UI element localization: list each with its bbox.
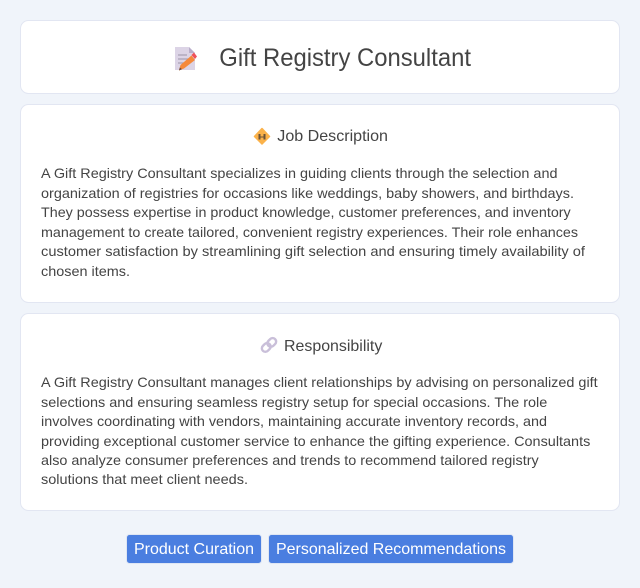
text block: job description: chosen items. [41,263,130,279]
heading: job description: Job Description [277,128,388,145]
text block: responsibility: providing exceptional customer service to enhance the gifting experience. Consultants [41,433,590,449]
icon: memo with pencil [175,47,197,70]
tag: personalized recommendations [268,534,514,564]
text block: responsibility: solutions that meet client needs. [41,471,248,487]
text block: job description: A Gift Registry Consultant specializes in guiding clients through the selection and [41,165,558,181]
text block: job description: They possess expertise in product knowledge, customer preferences, and inventory [41,204,571,220]
title: Gift Registry Consultant [219,44,471,72]
icon: chain link [260,337,278,353]
text block: job description: customer satisfaction by streamlining gift selection and ensuring timely availability of [41,243,585,259]
tag: personalized recommendations: Personalized Recommendations [276,541,506,558]
panel: title header [20,20,620,94]
text block: responsibility: also analyze consumer preferences and trends to recommend tailored registry [41,452,539,468]
text block: responsibility: A Gift Registry Consultant manages client relationships by advising on personalized gift [41,374,598,390]
tag: product curation: Product Curation [134,541,254,558]
panel: responsibility [20,314,620,510]
icon: orange diamond [254,128,270,144]
panel: job description [20,104,620,302]
text block: job description [41,165,585,279]
text block: responsibility: selections and ensuring seamless registry setup for special occasions. The role [41,394,548,410]
text block: job description: management to create tailored, convenient registry experiences. Their role enhances [41,224,578,240]
text block: responsibility [41,374,598,487]
heading: responsibility: Responsibility [284,338,382,355]
text block: job description: organization of registries for occasions like weddings, baby showers, and birthdays. [41,185,574,201]
text block: responsibility: involves coordinating with vendors, maintaining accurate inventory records, and [41,413,547,429]
tag: product curation [126,534,262,564]
